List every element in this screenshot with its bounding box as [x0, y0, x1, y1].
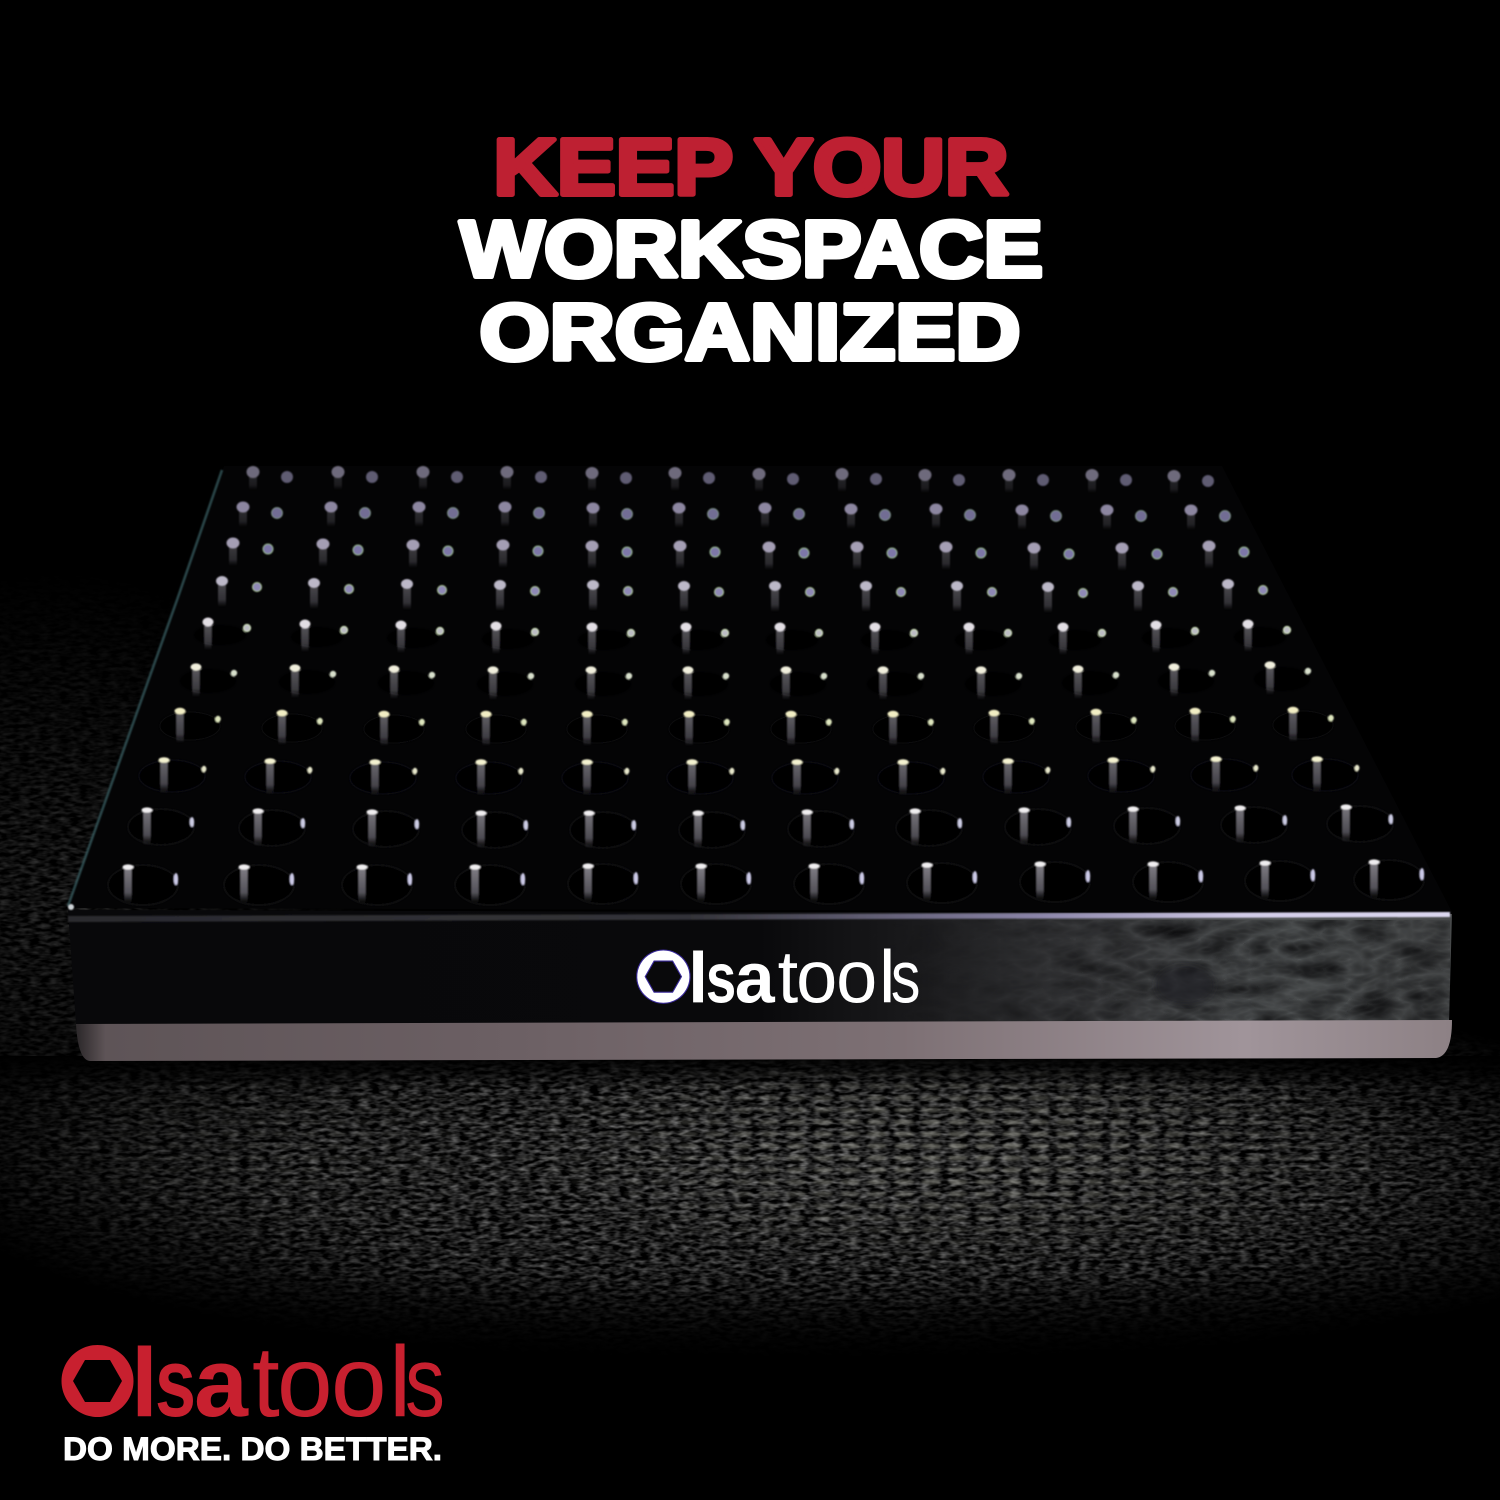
- logo final s: s: [405, 1327, 445, 1438]
- logo wordmark bold l: l: [688, 939, 708, 1019]
- base band: [76, 1020, 1452, 1061]
- logo bottom left: [62, 1326, 445, 1438]
- logo wordmark light: tool: [778, 936, 896, 1019]
- product: socket organizer tray: [68, 466, 1452, 1061]
- tagline: DO MORE. DO BETTER.: [63, 1431, 442, 1467]
- logo wordmark bold l: l: [131, 1328, 158, 1437]
- front edge highlight: [68, 912, 1450, 922]
- fade of fabric into black at bottom: [0, 1270, 1500, 1360]
- corner glint: [68, 904, 74, 910]
- logo ring with hexagon: [637, 950, 690, 1003]
- fabric work surface: [0, 630, 1500, 1335]
- tray front face: [68, 910, 1452, 1024]
- tray top face: [68, 466, 1452, 912]
- title: [460, 122, 1043, 376]
- logo final s: s: [891, 936, 920, 1019]
- logo wordmark light: tool: [252, 1326, 411, 1438]
- logo on tray front: [637, 936, 920, 1019]
- shadow under tray: [0, 1056, 1500, 1090]
- logo letter s: s: [706, 937, 736, 1018]
- tray holes and pins grid: [108, 466, 1424, 905]
- title line: organized: ORGANIZED: [480, 288, 1020, 376]
- title line: workspace: WORKSPACE: [460, 204, 1043, 294]
- logo letter a: a: [194, 1328, 249, 1437]
- fabric weave highlights: [88, 1072, 1396, 1256]
- tray left edge highlight: [68, 470, 222, 906]
- logo ring with hexagon: [62, 1345, 134, 1417]
- metallic reflections on front face: [986, 920, 1450, 1021]
- dark edge patches in reflection: [1155, 965, 1215, 1005]
- title line: keep your: KEEP YOUR: [494, 122, 1008, 212]
- logo letter s: s: [155, 1329, 196, 1437]
- logo letter a: a: [735, 939, 776, 1019]
